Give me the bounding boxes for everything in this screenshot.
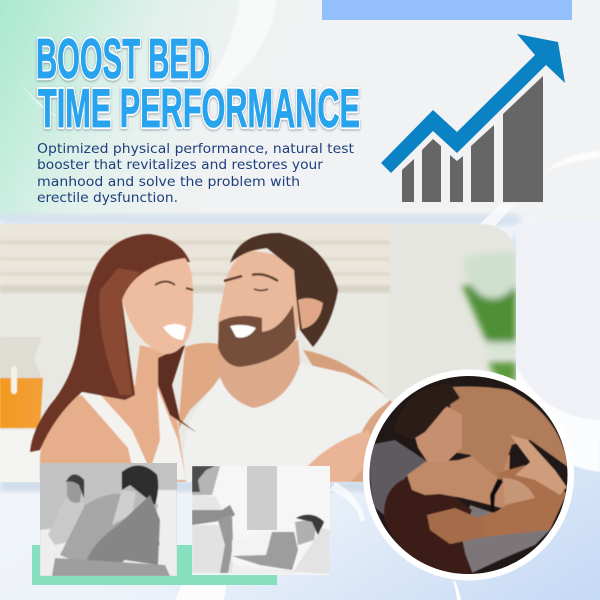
photo: disappointed couple in black and white (192, 466, 330, 575)
shirt (184, 363, 390, 482)
beard (218, 305, 296, 367)
title (36, 27, 360, 139)
description text: manhood and solve the problem with (37, 174, 300, 190)
description text: Optimized physical performance, natural test (37, 141, 354, 157)
man head (294, 520, 316, 546)
hair (230, 233, 338, 347)
hair strand right (158, 345, 197, 433)
woman (192, 466, 220, 495)
pillow (293, 528, 330, 574)
panel: happy couple photo (0, 224, 516, 482)
face (122, 258, 193, 354)
title: TIME PERFORMANCE (38, 77, 360, 139)
top blue bar (322, 0, 572, 20)
man face and hands (122, 485, 158, 511)
body (40, 345, 186, 482)
man shirt (60, 494, 160, 560)
ear (298, 298, 323, 329)
woman's hand (510, 435, 567, 495)
forearm and hand (350, 405, 384, 482)
title: BOOST BED (36, 27, 210, 91)
woman (30, 234, 197, 482)
sheet (462, 505, 550, 574)
title: TIME PERFORMANCE (38, 77, 360, 139)
icon: growth chart with arrow (381, 34, 565, 202)
man (178, 233, 392, 482)
arm behind woman (178, 343, 228, 430)
woman's face and chest (407, 455, 510, 510)
bed (40, 490, 177, 576)
title: BOOST BED (36, 27, 210, 91)
description text: erectile dysfunction. (37, 190, 178, 206)
man sheet and torso (231, 540, 234, 550)
bra strap (490, 478, 504, 512)
photo: stressed man in black and white (40, 463, 177, 576)
man's back (440, 386, 572, 480)
pillow (368, 440, 428, 520)
mint backing rectangle (32, 545, 277, 585)
woman behind (48, 495, 84, 545)
man's hand (427, 508, 485, 544)
man arm (86, 494, 160, 566)
face (218, 250, 300, 368)
top straps (80, 387, 186, 480)
eyes and brows (224, 274, 278, 281)
juice jug (0, 337, 43, 428)
bed (0, 430, 40, 482)
photo circle: couple embracing (360, 370, 580, 580)
woman's hair (384, 477, 473, 574)
hair (30, 234, 190, 452)
plant (462, 252, 516, 382)
description text (37, 141, 354, 206)
description text: booster that revitalizes and restores your (37, 157, 323, 173)
man's hair (393, 383, 460, 440)
headboard (0, 238, 391, 362)
man's face (413, 405, 462, 463)
man's arm (470, 465, 567, 537)
